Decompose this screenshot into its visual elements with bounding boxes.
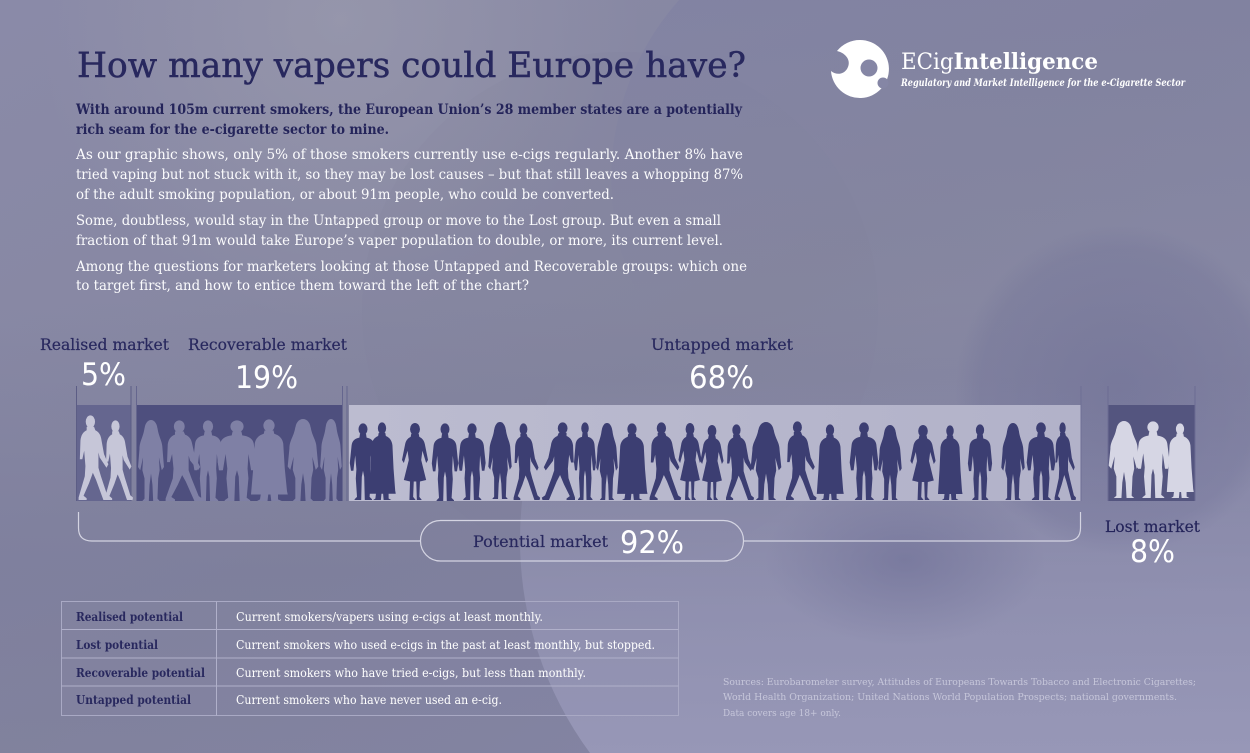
row: realised: Current smokers/vapers using e-cigs at least monthly. <box>236 610 543 624</box>
panel: lost market <box>1105 386 1201 570</box>
recoverable percentage: 19% <box>235 360 298 396</box>
sources <box>723 677 1196 719</box>
untapped silhouettes <box>350 421 1076 501</box>
lost silhouettes <box>1109 421 1194 498</box>
realised percentage: 5% <box>81 357 126 393</box>
recoverable silhouettes <box>138 419 342 501</box>
potential market bracket <box>78 512 1080 561</box>
panel: untapped market <box>349 335 1081 501</box>
untapped label: Untapped market <box>651 335 794 354</box>
icon: logo mark <box>831 40 889 98</box>
intro text: With around 105m current smokers, the European Union’s 28 member states are a potentially <box>75 102 743 118</box>
sources: Data covers age 18+ only. <box>723 708 841 719</box>
potential market label: Potential market <box>473 532 609 551</box>
row: untapped <box>76 693 502 707</box>
panel: recoverable market <box>136 335 348 501</box>
sources: Sources: Eurobarometer survey, Attitudes of Europeans Towards Tobacco and Electronic Cigarettes; <box>723 677 1196 688</box>
body text: tried vaping but not stuck with it, so they may be lost causes – but that still leaves a whopping 87% <box>76 167 743 183</box>
realised label: Realised market <box>40 335 170 354</box>
body text: As our graphic shows, only 5% of those smokers currently use e-cigs regularly. Another 8% have <box>75 147 743 163</box>
potential market percentage: 92% <box>620 525 684 561</box>
row: untapped: Untapped potential <box>76 693 191 707</box>
lost percentage: 8% <box>1130 534 1175 570</box>
body text: fraction of that 91m would take Europe’s vaper population to double, or more, its current level. <box>76 233 723 249</box>
body text: to target first, and how to entice them toward the left of the chart? <box>76 278 529 294</box>
row: lost: Lost potential <box>76 638 158 652</box>
recoverable bar <box>137 405 342 501</box>
realised silhouettes <box>79 415 133 500</box>
panel: realised market <box>40 335 170 501</box>
body text <box>75 147 747 294</box>
realised bar <box>77 405 131 501</box>
row: recoverable: Recoverable potential <box>76 666 205 680</box>
lost label: Lost market <box>1105 517 1201 536</box>
row: lost: Current smokers who used e-cigs in the past at least monthly, but stopped. <box>236 638 655 652</box>
row: realised: Realised potential <box>76 610 183 624</box>
intro text: rich seam for the e-cigarette sector to mine. <box>76 122 389 138</box>
logo <box>831 40 1186 98</box>
untapped percentage: 68% <box>689 360 754 396</box>
logo tagline: Regulatory and Market Intelligence for the e-Cigarette Sector <box>900 78 1186 89</box>
row: untapped: Current smokers who have never used an e-cig. <box>236 693 502 707</box>
potential market pill <box>420 520 744 561</box>
row: recoverable: Current smokers who have tried e-cigs, but less than monthly. <box>236 666 586 680</box>
recoverable label: Recoverable market <box>188 335 348 354</box>
row: realised <box>76 610 543 624</box>
untapped bar <box>349 405 1081 501</box>
body text: Among the questions for marketers looking at those Untapped and Recoverable groups: which one <box>75 259 747 275</box>
intro text <box>75 102 743 138</box>
lost bar <box>1108 405 1195 501</box>
title: How many vapers could Europe have? <box>77 46 746 86</box>
row: lost <box>76 638 655 652</box>
logo wordmark: ECigIntelligence <box>901 49 1098 75</box>
row: recoverable <box>76 666 586 680</box>
definitions table <box>62 602 678 716</box>
sources: World Health Organization; United Nations World Population Prospects; national governments. <box>723 692 1177 703</box>
body text: of the adult smoking population, or about 91m people, who could be converted. <box>76 187 614 203</box>
body text: Some, doubtless, would stay in the Untapped group or move to the Lost group. But even a small <box>76 213 721 229</box>
